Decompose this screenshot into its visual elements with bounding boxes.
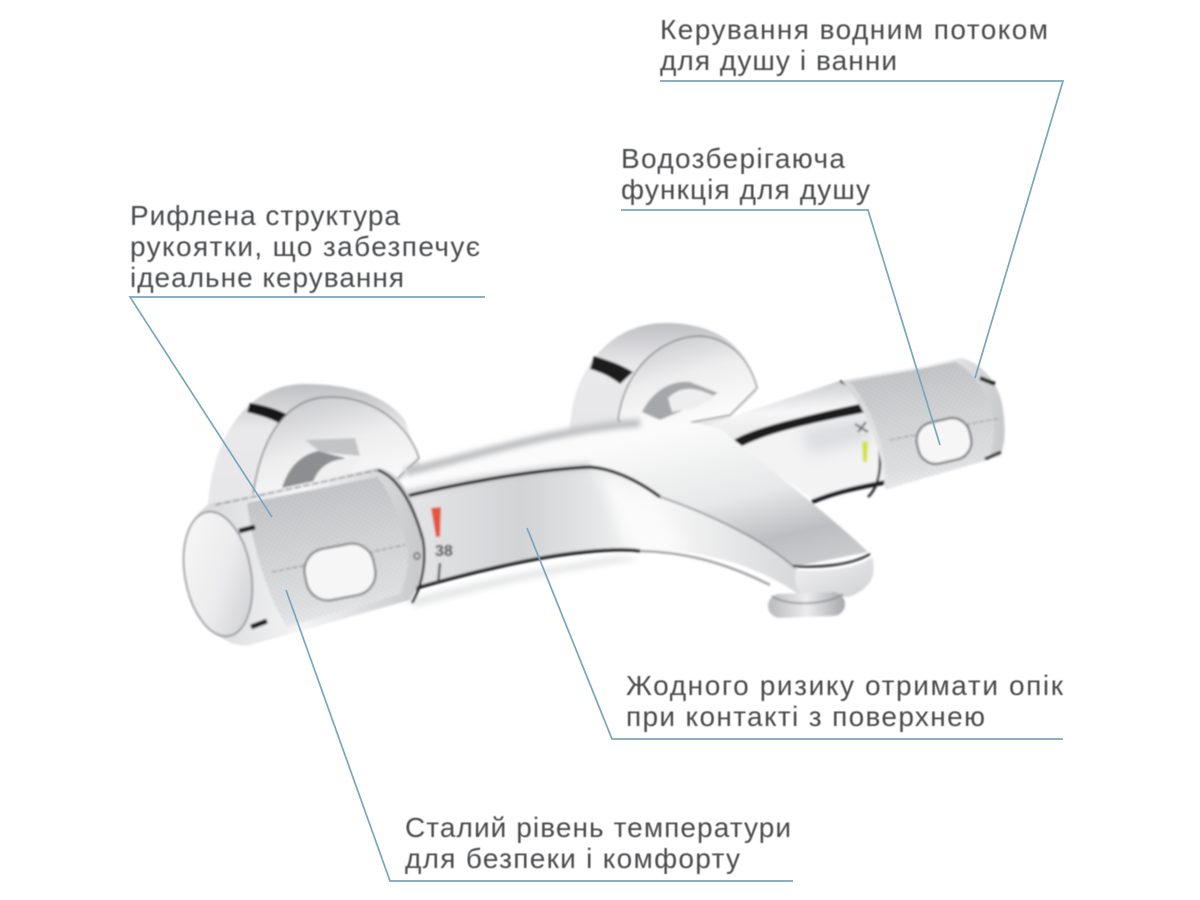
right button — [913, 414, 975, 468]
leader line: no burn risk — [527, 528, 1063, 739]
label: ribbed handle: ідеальне керування — [130, 262, 404, 293]
left wall plate — [208, 384, 422, 515]
label: constant temperature — [405, 812, 791, 874]
left handle — [175, 468, 424, 646]
flow symbol — [855, 422, 868, 432]
spout and upper band — [395, 419, 874, 618]
cap — [175, 506, 261, 642]
label: constant temperature: для безпеки і комфорту — [405, 843, 740, 874]
label: constant temperature: Сталий рівень температури — [405, 812, 791, 843]
small engraving — [414, 553, 420, 559]
label: water flow control: Керування водним потоком — [660, 14, 1048, 45]
label: ribbed handle: Рифлена структура — [130, 200, 400, 231]
red temperature mark — [431, 507, 441, 537]
knurled grip — [247, 477, 408, 627]
right arm of the body — [700, 380, 887, 502]
leader line: water flow control — [660, 81, 1063, 378]
label: no burn risk — [626, 670, 1064, 732]
label: no burn risk: Жодного ризику отримати опік — [626, 670, 1064, 701]
label: water saving function: Водозберігаюча — [621, 143, 845, 174]
label: water flow control — [660, 14, 1048, 76]
green mark — [862, 441, 868, 462]
right handle — [842, 358, 1005, 490]
label: no burn risk: при контакті з поверхнею — [626, 701, 985, 732]
faucet illustration — [175, 323, 1005, 646]
label: ribbed handle: рукоятки, що забезпечує — [130, 231, 480, 262]
leader line: ribbed handle — [130, 297, 485, 517]
scale 38: 38 — [435, 543, 453, 560]
button — [301, 540, 379, 604]
label: ribbed handle — [130, 200, 480, 293]
label: water saving function: функція для душу — [621, 174, 870, 205]
right wall plate — [570, 323, 757, 445]
body lower surface — [403, 468, 800, 607]
label: water flow control: для душу і ванни — [660, 45, 897, 76]
leader line: water saving — [621, 210, 940, 445]
leader line: constant temperature — [286, 590, 793, 881]
label: water saving function — [621, 143, 870, 205]
